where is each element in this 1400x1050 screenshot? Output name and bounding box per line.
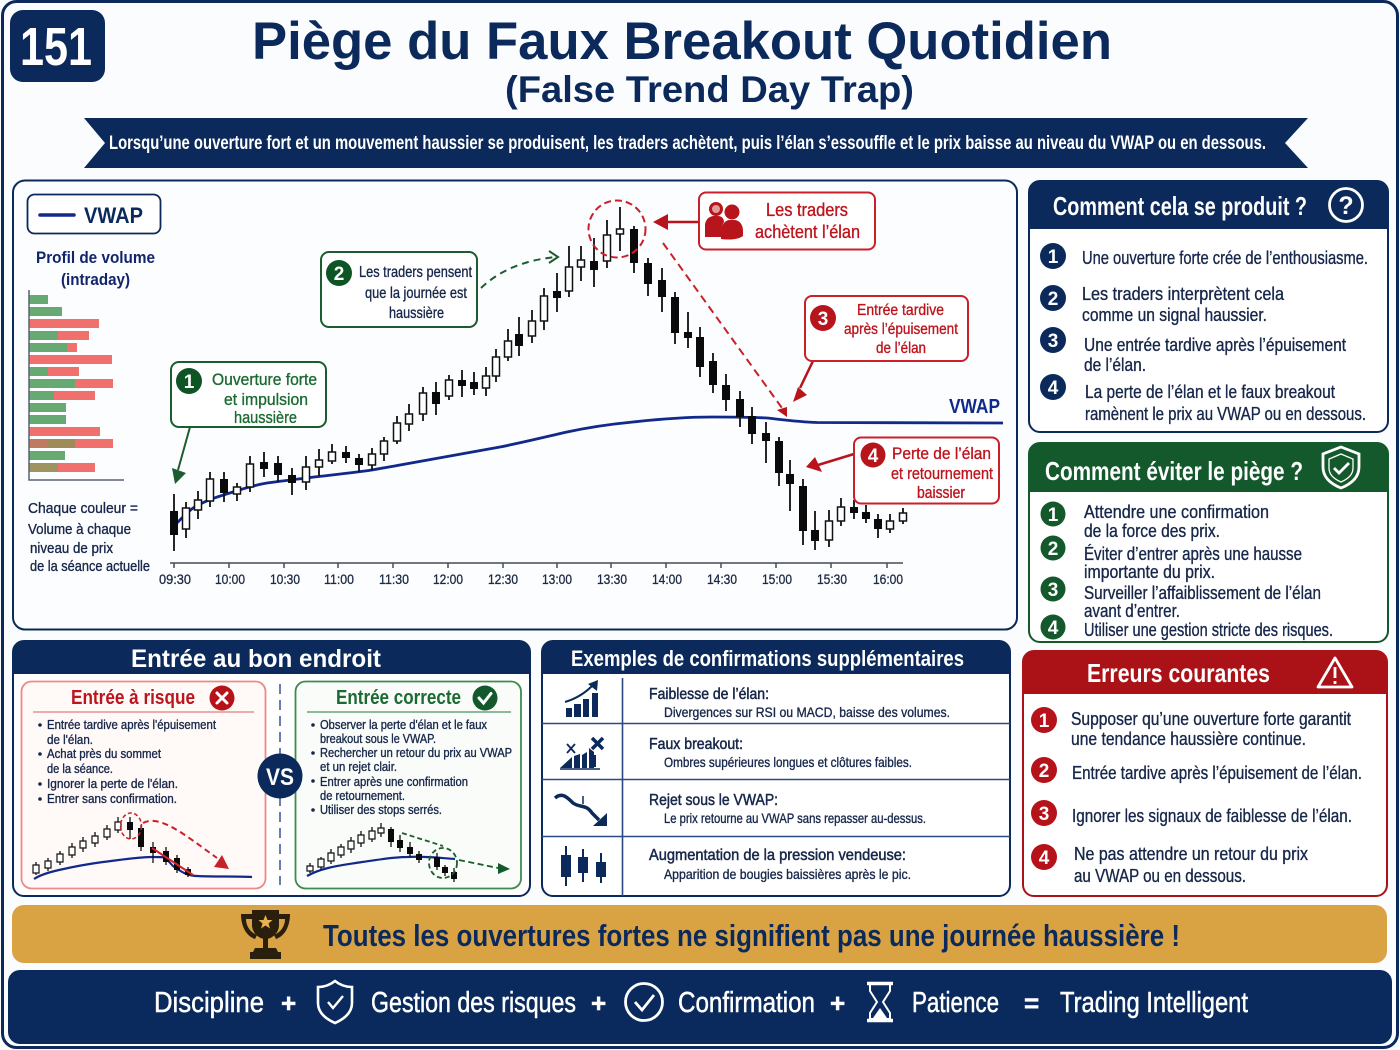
row: momentum weakness: Faiblesse de l’élan: <box>649 686 769 703</box>
axis: time: 12:00 <box>433 571 463 587</box>
row: momentum weakness <box>649 686 950 720</box>
chart: candlesticks <box>170 207 906 551</box>
list: risky entry: de l'élan. <box>47 732 93 747</box>
footer: formula: + <box>591 988 606 1018</box>
badge: VS: VS <box>266 764 294 791</box>
text: profile caption: niveau de prix <box>30 540 113 557</box>
footer: formula: Patience <box>912 987 999 1019</box>
callout 2: que la journée est <box>365 285 467 302</box>
list: mistakes: au VWAP ou en dessous. <box>1074 866 1246 886</box>
list: how it happens steps: Une entrée tardive après l’épuisement <box>1084 335 1346 355</box>
banner: key message <box>12 905 1387 963</box>
list: mistakes: Supposer qu’une ouverture forte garantit <box>1071 709 1351 729</box>
list: mistakes: Ignorer les signaux de faiblesse de l’élan. <box>1072 806 1352 826</box>
axis: time: 14:00 <box>652 571 682 587</box>
panel: avoid the trap <box>1029 443 1388 642</box>
panel: right entry: Entrée au bon endroit <box>131 645 382 673</box>
row: VWAP rejection <box>649 792 926 826</box>
row: VWAP rejection: Rejet sous le VWAP: <box>649 792 778 809</box>
marker: dashed circle on peak <box>588 200 646 258</box>
icon: cross <box>210 686 234 710</box>
list: how it happens steps: 2 <box>1048 289 1058 310</box>
list: avoid steps: Éviter d’entrer après une hausse <box>1084 544 1302 564</box>
legend: VWAP <box>28 194 160 234</box>
heading: volume profile <box>36 248 155 289</box>
list: avoid steps: Surveiller l’affaiblissement de l’élan <box>1084 583 1321 603</box>
callout 2: Les traders pensent <box>359 264 472 281</box>
callout 1: Ouverture forte <box>212 370 317 389</box>
list: risky entry <box>38 717 216 806</box>
callout 1: 1 <box>184 372 195 393</box>
footer: formula: Gestion des risques <box>371 987 576 1019</box>
arrow: callout 3 <box>793 361 813 402</box>
list: risky entry: Entrée tardive après l'épuisement <box>47 717 216 732</box>
legend: VWAP: VWAP <box>84 203 143 228</box>
list: correct entry: Rechercher un retour du prix au VWAP <box>320 745 512 760</box>
callout 3: de l’élan <box>876 340 926 357</box>
callout 1 <box>171 362 326 427</box>
row: momentum weakness: Divergences sur RSI ou MACD, baisse des volumes. <box>664 704 950 720</box>
card: correct entry <box>296 682 521 888</box>
icon: warning triangle <box>1318 658 1352 687</box>
footer: formula: + <box>281 988 296 1018</box>
callout: traders buy <box>699 192 875 250</box>
icon: hourglass <box>867 984 893 1020</box>
heading: volume profile: Profil de volume <box>36 248 155 267</box>
list: mistakes: une tendance haussière continue. <box>1071 729 1306 749</box>
list: correct entry: breakout sous le VWAP. <box>320 731 436 746</box>
panel: how it happens: Comment cela se produit ? <box>1053 191 1307 221</box>
list: avoid steps: 3 <box>1048 580 1058 601</box>
arrow: callout 4 <box>806 454 854 472</box>
card: risky entry <box>22 682 266 888</box>
icon: check <box>472 686 498 710</box>
callout 4: 4 <box>868 446 879 467</box>
list: how it happens steps: 3 <box>1048 331 1058 352</box>
list: risky entry: Entrer sans confirmation. <box>47 791 177 806</box>
axis: time: 11:00 <box>324 571 354 587</box>
list: how it happens steps: comme un signal haussier. <box>1082 305 1267 325</box>
list: how it happens steps: 4 <box>1048 378 1059 399</box>
list: avoid steps: 2 <box>1048 539 1058 560</box>
icon: bearish candles <box>561 846 606 886</box>
row: false breakout: Faux breakout: <box>649 736 743 753</box>
list: how it happens steps: 1 <box>1048 247 1059 268</box>
list: mistakes: Ne pas attendre un retour du prix <box>1074 844 1308 864</box>
icon: rising bars <box>565 680 598 717</box>
list: how it happens steps: de l’élan. <box>1084 355 1146 375</box>
icon: false breakout <box>560 738 603 769</box>
row: VWAP rejection: Le prix retourne au VWAP sans repasser au-dessus. <box>664 810 926 826</box>
row: selling pressure <box>649 847 911 882</box>
icon: VWAP rejection <box>555 795 607 826</box>
list: avoid steps: importante du prix. <box>1084 562 1215 582</box>
callout 2: 2 <box>334 264 344 285</box>
panel: avoid the trap: Comment éviter le piège ? <box>1045 456 1303 486</box>
footer: formula <box>8 970 1392 1044</box>
axis: time: 14:30 <box>707 571 737 587</box>
list: how it happens steps: La perte de l’élan et le faux breakout <box>1085 382 1335 402</box>
icon: shield check <box>1323 447 1359 488</box>
row: selling pressure: Augmentation de la pression vendeuse: <box>649 847 906 864</box>
title: Piège du Faux Breakout Quotidien <box>252 12 1112 71</box>
label: VWAP line: VWAP <box>949 396 1000 418</box>
callout 2: haussière <box>389 305 444 322</box>
badge: number 151: 151 <box>20 17 92 77</box>
list: risky entry: de la séance. <box>47 761 113 776</box>
icon: shield <box>318 981 352 1023</box>
arrow: callout 1 to open <box>172 427 190 484</box>
row: selling pressure: Apparition de bougies baissières après le pic. <box>664 866 911 882</box>
ribbon: summary <box>84 118 1308 168</box>
callout 4: baissier <box>917 484 965 502</box>
subtitle: (False Trend Day Trap) <box>505 69 914 110</box>
mini chart: risky entry <box>33 813 252 879</box>
icon: traders <box>705 202 743 240</box>
list: avoid steps: Utiliser une gestion stricte des risques. <box>1084 620 1333 640</box>
list: avoid steps: 4 <box>1048 618 1059 639</box>
axis: time: 11:30 <box>379 571 409 587</box>
card: correct entry: Entrée correcte <box>336 687 461 709</box>
list: correct entry <box>311 717 512 817</box>
panel: common mistakes <box>1023 651 1387 896</box>
list: risky entry: Ignorer la perte de l'élan. <box>47 776 178 791</box>
axis: time <box>159 563 903 587</box>
list: correct entry: Entrer après une confirmation <box>320 774 468 789</box>
callout 1: et impulsion <box>224 390 308 409</box>
callout: traders buy: achètent l’élan <box>755 222 860 242</box>
list: risky entry: Achat près du sommet <box>47 746 161 761</box>
callout 1: haussière <box>234 408 297 427</box>
axis: time: 15:00 <box>762 571 792 587</box>
text: profile caption: Chaque couleur = <box>28 500 138 517</box>
badge: VS <box>258 754 302 798</box>
arrow: red dashed decline <box>663 243 787 417</box>
axis: time: 15:30 <box>817 571 847 587</box>
icon: question mark <box>1330 188 1362 222</box>
card: risky entry: Entrée à risque <box>71 687 195 709</box>
panel: extra confirmations: Exemples de confirmations supplémentaires <box>571 646 964 671</box>
callout 4 <box>854 438 999 504</box>
line: VWAP <box>174 417 1003 526</box>
text: profile caption <box>28 500 150 575</box>
panel: common mistakes: Erreurs courantes <box>1087 658 1270 688</box>
callout: traders buy: Les traders <box>766 200 848 220</box>
chart: volume profile bars <box>29 290 124 480</box>
footer: formula: + <box>830 988 845 1018</box>
callout 3 <box>805 296 968 361</box>
list: avoid steps: de la force des prix. <box>1084 521 1220 541</box>
axis: time: 10:00 <box>215 571 245 587</box>
divider: dashed vertical <box>279 684 281 885</box>
list: correct entry: de retournement. <box>320 788 405 803</box>
callout 3: 3 <box>818 309 828 330</box>
list: mistakes: 4 <box>1039 848 1050 869</box>
footer: formula: Confirmation <box>678 987 815 1019</box>
icon: trophy <box>241 910 290 959</box>
heading: volume profile: (intraday) <box>61 270 130 289</box>
callout 2 <box>321 252 477 327</box>
icon: question mark: ? <box>1338 192 1354 220</box>
callout 4: Perte de l’élan <box>892 445 991 463</box>
list: correct entry: Observer la perte d'élan et le faux <box>320 717 487 732</box>
mini chart: correct entry <box>307 823 510 882</box>
arrow: callout 2 dashed <box>481 251 558 288</box>
panel: main chart <box>13 180 1017 630</box>
row: false breakout: Ombres supérieures longues et clôtures faibles. <box>664 754 912 770</box>
axis: time: 16:00 <box>873 571 903 587</box>
panel: right entry <box>13 641 530 896</box>
list: correct entry: Utiliser des stops serrés. <box>320 802 442 817</box>
callout 4: et retournement <box>891 465 993 483</box>
list: mistakes: 1 <box>1039 711 1050 732</box>
callout 3: Entrée tardive <box>857 302 944 319</box>
list: avoid steps: 1 <box>1048 505 1059 526</box>
footer: formula: Discipline <box>154 987 264 1019</box>
row: false breakout <box>649 736 912 770</box>
panel: how it happens <box>1029 181 1388 432</box>
list: how it happens steps <box>1040 243 1368 424</box>
footer: formula: Trading Intelligent <box>1060 987 1248 1019</box>
axis: time: 12:30 <box>488 571 518 587</box>
footer: formula: = <box>1024 988 1039 1018</box>
banner: key message: Toutes les ouvertures fortes ne signifient pas une journée haussière ! <box>323 918 1180 953</box>
callout 3: après l’épuisement <box>844 321 959 338</box>
text: profile caption: Volume à chaque <box>28 521 131 538</box>
axis: time: 10:30 <box>270 571 300 587</box>
axis: time: 09:30 <box>159 571 191 587</box>
axis: time: 13:30 <box>597 571 627 587</box>
list: mistakes <box>1031 707 1362 886</box>
arrow: traders to peak <box>653 214 699 230</box>
axis: time: 13:00 <box>542 571 572 587</box>
list: mistakes: 2 <box>1039 761 1049 782</box>
list: mistakes: 3 <box>1039 804 1049 825</box>
list: avoid steps: avant d’entrer. <box>1084 601 1180 621</box>
list: correct entry: et un rejet clair. <box>320 759 397 774</box>
icon: check circle <box>626 984 662 1020</box>
text: profile caption: de la séance actuelle <box>30 558 150 575</box>
panel: extra confirmations <box>542 641 1010 896</box>
list: avoid steps: Attendre une confirmation <box>1084 502 1269 522</box>
list: avoid steps <box>1040 502 1333 640</box>
list: how it happens steps: Les traders interprètent cela <box>1082 284 1285 304</box>
